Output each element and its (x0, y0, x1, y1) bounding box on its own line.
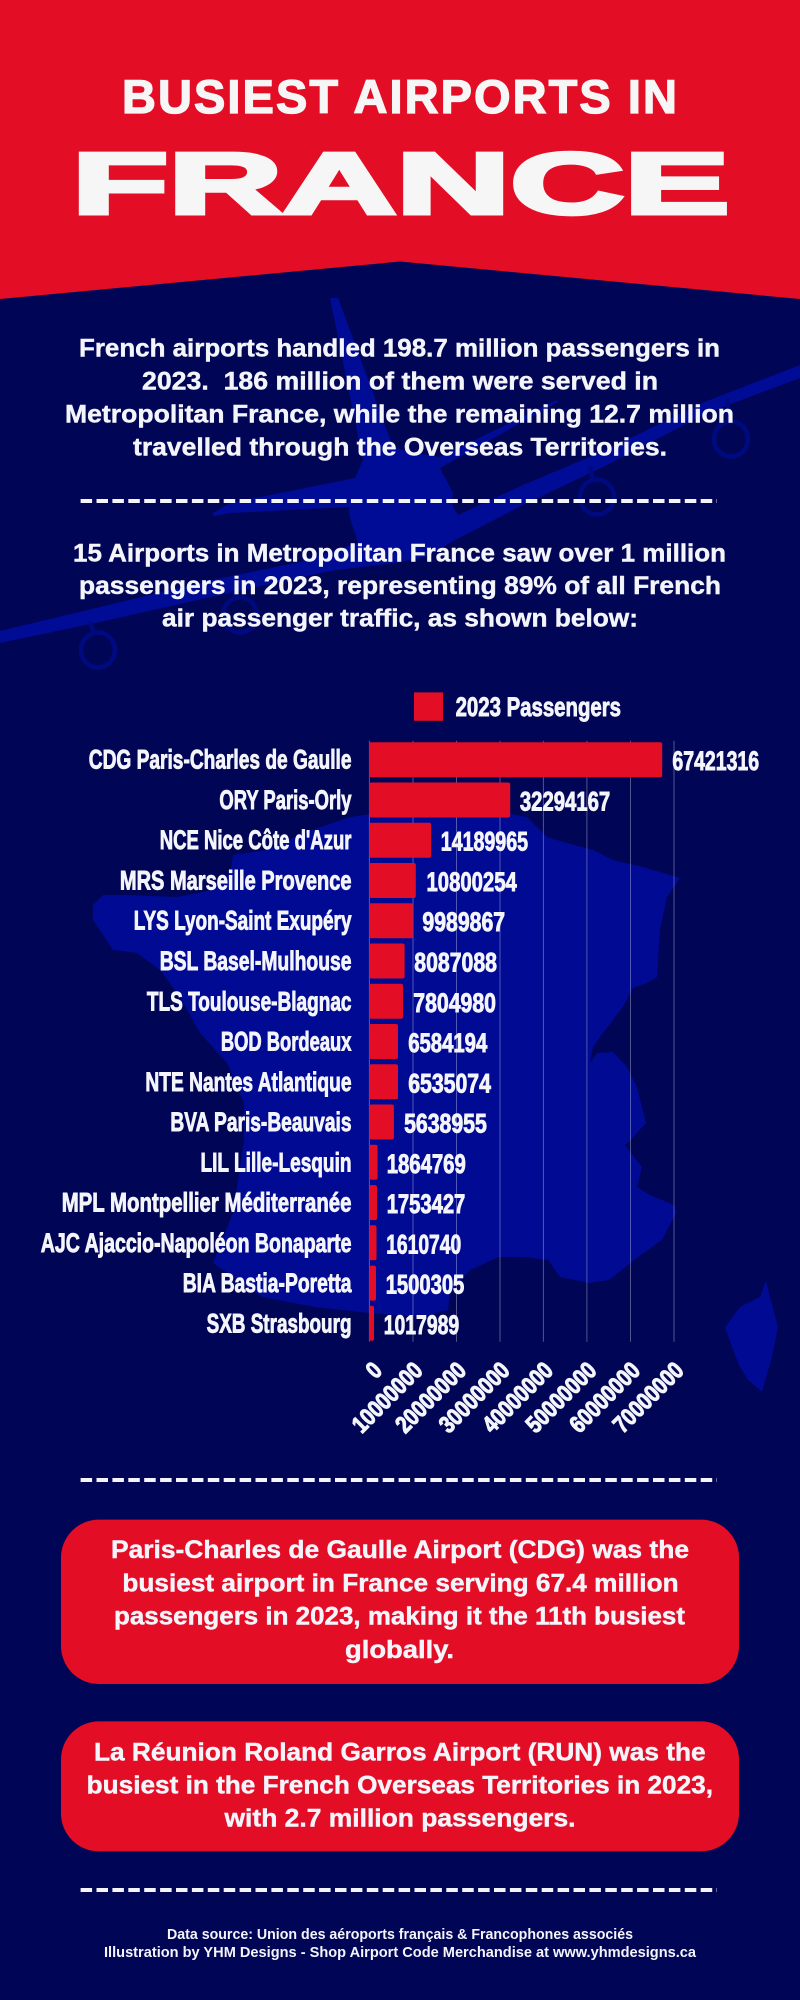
callout: CDG: busiest airport in France serving 67.4 million (122, 1570, 679, 1598)
x axis tick labels: 40000000 (477, 1357, 559, 1438)
row: BSL (160, 944, 497, 978)
x axis tick labels: 0 (361, 1357, 388, 1384)
credits: Data source: Union des aéroports français & Francophones associés (167, 1926, 633, 1943)
row: LYS: LYS Lyon-Saint Exupéry (134, 906, 352, 936)
row: BOD: 6584194 (408, 1028, 487, 1058)
row: SXB: 1017989 (384, 1310, 459, 1340)
row: TLS: TLS Toulouse-Blagnac (147, 986, 352, 1016)
row: SXB (207, 1306, 459, 1341)
intro paragraph: French airports handled 198.7 million passengers in (79, 334, 720, 362)
row: CDG: CDG Paris-Charles de Gaulle (89, 745, 352, 775)
row: LYS: 9989867 (422, 907, 505, 937)
callout: RUN: La Réunion Roland Garros Airport (RUN) was the (94, 1738, 706, 1766)
row: NTE: 6535074 (408, 1068, 491, 1098)
x axis tick labels: 20000000 (390, 1357, 472, 1438)
row: BOD (221, 1024, 487, 1059)
chart legend (414, 692, 621, 722)
header banner (0, 0, 800, 299)
metropolitan France paragraph: air passenger traffic, as shown below: (162, 604, 638, 632)
x axis tick labels: 10000000 (347, 1357, 428, 1438)
row: BVA: BVA Paris-Beauvais (170, 1107, 352, 1137)
row: MPL: MPL Montpellier Méditerranée (62, 1188, 351, 1218)
row: ORY (219, 782, 610, 818)
row: ORY: ORY Paris-Orly (219, 785, 352, 815)
row: LIL: LIL Lille-Lesquin (200, 1147, 352, 1177)
row: NCE: NCE Nice Côte d'Azur (160, 825, 352, 855)
row: BIA: 1500305 (386, 1270, 464, 1300)
row: NTE: NTE Nantes Atlantique (145, 1067, 352, 1097)
callout: CDG: globally. (345, 1636, 454, 1664)
x axis tick labels: 30000000 (434, 1357, 515, 1438)
title: BUSIEST AIRPORTS IN (122, 70, 677, 123)
callout: CDG: Paris-Charles de Gaulle Airport (CDG) was the (111, 1536, 689, 1564)
title (72, 70, 729, 232)
credits (104, 1926, 697, 1961)
row: CDG (89, 742, 759, 777)
row: MRS: MRS Marseille Provence (120, 866, 352, 896)
credits: Illustration by YHM Designs - Shop Airport Code Merchandise at www.yhmdesigns.ca (104, 1944, 697, 1961)
title: FRANCE (72, 136, 729, 232)
row: BSL: 8087088 (414, 948, 497, 978)
callout: RUN: with 2.7 million passengers. (223, 1804, 575, 1832)
callout: CDG (61, 1520, 739, 1684)
row: AJC: 1610740 (386, 1229, 461, 1259)
metropolitan France paragraph (73, 540, 726, 632)
row: MRS: 10800254 (426, 867, 517, 897)
illustration: airplane silhouette (0, 298, 800, 668)
bar chart: 2023 passengers (41, 741, 759, 1438)
callout: RUN (61, 1721, 739, 1851)
intro paragraph: Metropolitan France, while the remaining 12.7 million (65, 400, 734, 428)
row: MRS (120, 863, 517, 898)
row: MPL: 1753427 (387, 1189, 465, 1219)
metropolitan France paragraph: 15 Airports in Metropolitan France saw over 1 million (73, 540, 726, 568)
row: CDG: 67421316 (672, 746, 759, 776)
row: BIA: BIA Bastia-Poretta (183, 1268, 352, 1298)
callout: RUN: busiest in the French Overseas Territories in 2023, (87, 1772, 713, 1800)
row: AJC: AJC Ajaccio-Napoléon Bonaparte (41, 1228, 352, 1258)
row: BSL: BSL Basel-Mulhouse (160, 946, 352, 976)
callout: CDG: passengers in 2023, making it the 11th busiest (114, 1602, 686, 1630)
row: LIL (200, 1145, 466, 1180)
row: BOD: BOD Bordeaux (221, 1026, 352, 1056)
row: ORY: 32294167 (520, 786, 610, 816)
row: TLS: 7804980 (413, 988, 496, 1018)
metropolitan France paragraph: passengers in 2023, representing 89% of all French (79, 572, 721, 600)
x axis tick labels: 70000000 (608, 1357, 689, 1438)
x axis tick labels: 50000000 (521, 1357, 602, 1438)
chart legend: 2023 Passengers (456, 692, 621, 722)
row: NCE (160, 823, 528, 858)
intro paragraph: travelled through the Overseas Territories. (133, 434, 667, 462)
x axis tick labels (347, 1357, 689, 1438)
intro paragraph: 2023. 186 million of them were served in (142, 368, 658, 396)
x axis tick labels: 60000000 (564, 1357, 646, 1438)
row: NCE: 14189965 (441, 827, 528, 857)
row: SXB: SXB Strasbourg (207, 1308, 352, 1338)
intro paragraph (65, 334, 734, 462)
row: BVA: 5638955 (404, 1108, 487, 1138)
illustration: map of France (93, 812, 778, 1392)
row: LIL: 1864769 (387, 1149, 466, 1179)
row: BVA (170, 1104, 487, 1140)
